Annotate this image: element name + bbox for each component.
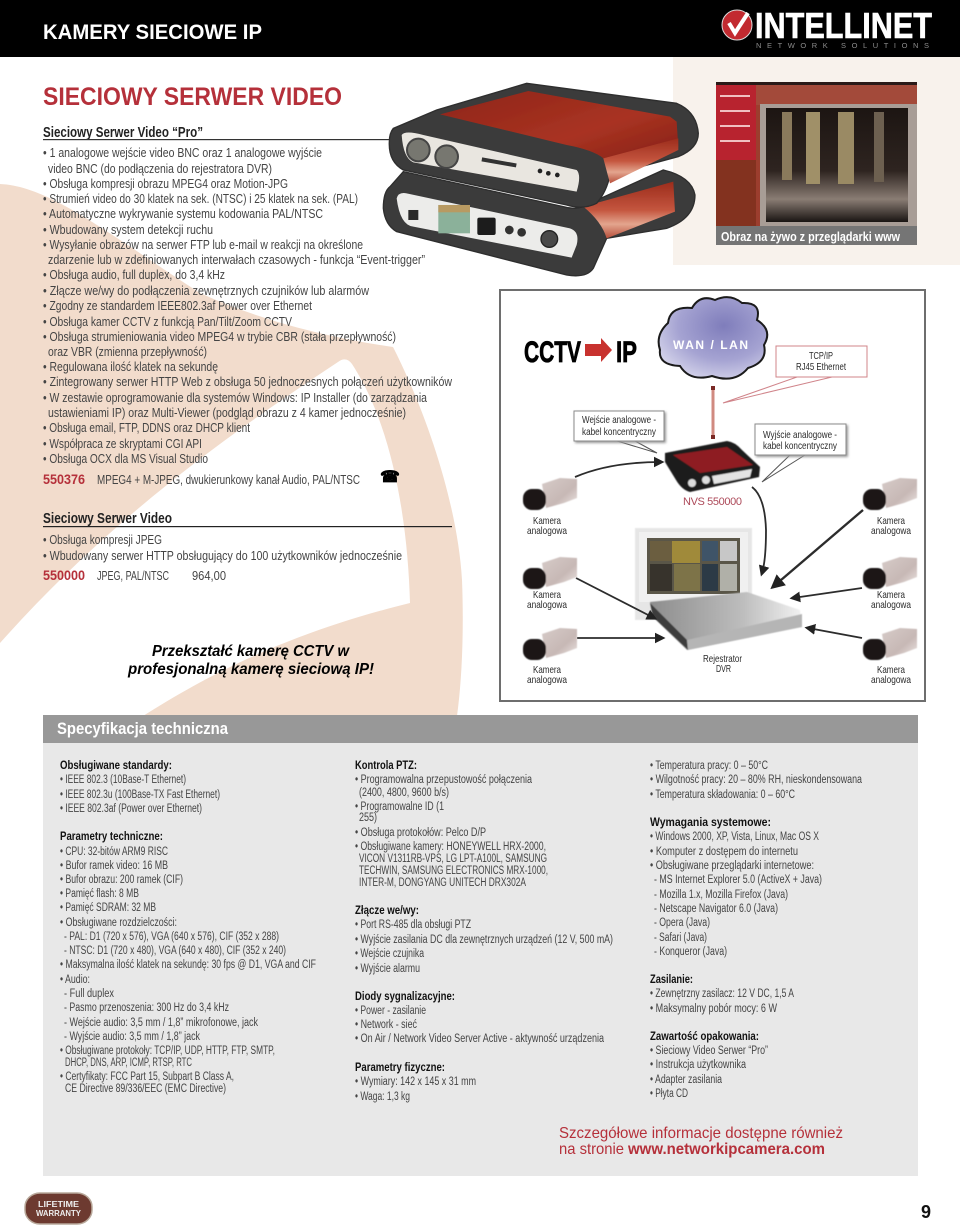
- feature list: Pro: • 1 analogowe wejście video BNC oraz 1 analogowe wyjście: [43, 146, 322, 160]
- spec column 3: Zawartość opakowania:: [650, 1031, 759, 1043]
- spec column 1: - NTSC: D1 (720 x 480), VGA (640 x 480), CIF (352 x 240): [64, 945, 286, 957]
- label: analog input: kabel koncentryczny: [582, 426, 657, 438]
- label: analog input: [574, 411, 664, 453]
- spec column 2: • Obsługiwane kamery: HONEYWELL HRX-2000,: [355, 841, 546, 853]
- section heading: Pro: Sieciowy Serwer Video “Pro”: [43, 125, 203, 141]
- feature list: Pro: • Obsługa email, FTP, DDNS oraz DHCP klient: [43, 421, 250, 435]
- spec column 1: - Full duplex: [64, 988, 114, 1000]
- title: CCTV to IP: CCTV: [524, 336, 581, 369]
- icon: telephone: ☎: [380, 467, 400, 486]
- feature list: 550000: • Obsługa kompresji JPEG: [43, 533, 162, 547]
- spec column 1: • Pamięć SDRAM: 32 MB: [60, 902, 156, 914]
- logo: Intellinet: INTELLINET: [755, 5, 932, 46]
- spec column 3: - Konqueror (Java): [654, 946, 727, 958]
- decorative peach arc: [0, 184, 463, 716]
- spec column 3: - Netscape Navigator 6.0 (Java): [654, 903, 778, 915]
- label: TCP/IP: [723, 346, 867, 403]
- spec column 2: Parametry fizyczne:: [355, 1062, 445, 1074]
- panel: technical specification: [43, 715, 918, 1176]
- spec column 2: • Waga: 1,3 kg: [355, 1091, 410, 1103]
- label: DVR: [703, 653, 742, 675]
- section heading: Sieciowy Serwer Video: Sieciowy Serwer Video: [43, 511, 172, 527]
- caption bar: [716, 226, 917, 245]
- badge: lifetime warranty: [25, 1193, 92, 1224]
- spec column 1: • Audio:: [60, 974, 90, 986]
- label: analog output: [755, 424, 846, 482]
- spec column 2: INTER-M, DONGYANG UNITECH DRX302A: [359, 877, 526, 889]
- spec column 3: • Windows 2000, XP, Vista, Linux, Mac OS X: [650, 831, 819, 843]
- spec column 1: • Obsługiwane rozdzielczości:: [60, 917, 177, 929]
- spec column 2: • Programowalna przepustowość połączenia: [355, 774, 532, 786]
- spec column 3: - Safari (Java): [654, 932, 707, 944]
- spec column 1: - Wyjście audio: 3,5 mm / 1,8” jack: [64, 1031, 200, 1043]
- product code: 550000: [43, 567, 226, 583]
- camera: right top: [863, 478, 917, 537]
- camera: right top: Kamera: [877, 515, 905, 527]
- spec column 2: • Wyjście zasilania DC dla zewnętrznych urządzeń (12 V, 500 mA): [355, 934, 613, 946]
- browser screenshot: [716, 82, 917, 226]
- spec column 3: - Mozilla 1.x, Mozilla Firefox (Java): [654, 889, 788, 901]
- camera: right bottom: analogowa: [871, 674, 911, 686]
- feature list: Pro: • Obsługa audio, full duplex, do 3,4 kHz: [43, 268, 225, 282]
- camera: left bottom: [523, 628, 577, 686]
- camera: right middle: [863, 557, 917, 611]
- callout: slogan: profesjonalną kamerę sieciową IP!: [127, 661, 375, 678]
- label: DVR: Rejestrator: [703, 653, 742, 665]
- spec title bar: Specyfikacja techniczna: [57, 720, 229, 738]
- bottom unit front panel: [397, 193, 577, 258]
- feature list: Pro: oraz VBR (zmienna przepływność): [48, 345, 207, 359]
- spec column 1: Obsługiwane standardy:: [60, 760, 172, 772]
- camera: left middle: [523, 557, 577, 611]
- spec column 2: VICON V1311RB-VPS, LG LPT-A100L, SAMSUNG: [359, 853, 547, 865]
- spec column 2: • Wymiary: 142 x 145 x 31 mm: [355, 1076, 476, 1088]
- feature list: Pro: • Obsługa strumieniowania video MPEG4 w trybie CBR (stała przepływność): [43, 330, 396, 344]
- feature list: Pro: • Automatyczne wykrywanie systemu kodowania PAL/NTSC: [43, 207, 323, 221]
- top unit red cover: [440, 91, 678, 173]
- spec column 1: Parametry techniczne:: [60, 831, 163, 843]
- spec column 3: • Maksymalny pobór mocy: 6 W: [650, 1003, 777, 1015]
- page number: 9: [921, 1202, 931, 1222]
- callout: slogan: Przekształć kamerę CCTV w: [152, 643, 350, 660]
- feature list: Pro: • Współpraca ze skryptami CGI API: [43, 437, 202, 451]
- feature list: Pro: • Wbudowany system detekcji ruchu: [43, 223, 213, 237]
- main heading: SIECIOWY SERWER VIDEO: [43, 83, 342, 111]
- feature list: Pro: • Regulowana ilość klatek na sekundę: [43, 360, 218, 374]
- spec column 1: • Bufor obrazu: 200 ramek (CIF): [60, 874, 183, 886]
- spec column 3: • Adapter zasilania: [650, 1074, 722, 1086]
- caption bar: Obraz na żywo z przeglądarki www: [721, 230, 900, 244]
- label: DVR: DVR: [716, 663, 731, 675]
- feature list: Pro: • Wysyłanie obrazów na serwer FTP lub e-mail w reakcji na określone: [43, 238, 363, 252]
- callout: slogan: [127, 643, 375, 678]
- photo: network video servers: [383, 83, 698, 276]
- spec column 2: Złącze we/wy:: [355, 905, 419, 917]
- feature list: Pro: • Obsługa kamer CCTV z funkcją Pan/Tilt/Zoom CCTV: [43, 315, 293, 329]
- camera: right bottom: [863, 628, 917, 686]
- spec column 2: [355, 760, 613, 1103]
- spec column 2: • Wyjście alarmu: [355, 963, 420, 975]
- spec column 2: • On Air / Network Video Server Active - aktywność urządzenia: [355, 1033, 604, 1045]
- website note: Szczegółowe informacje dostępne również: [559, 1125, 843, 1142]
- spec column 3: • Wilgotność pracy: 20 – 80% RH, nieskondensowana: [650, 774, 862, 786]
- product code: 550000: 550000: [43, 567, 85, 583]
- feature list: Pro: • Zintegrowany serwer HTTP Web z obsługa 50 jednoczesnych połączeń użytkowników: [43, 375, 453, 389]
- top unit front panel: [402, 132, 579, 192]
- panel: CCTV to IP diagram: [500, 290, 925, 701]
- feature list: Pro: video BNC (do podłączenia do rejestratora DVR): [48, 162, 272, 176]
- label: TCP/IP: TCP/IP: [809, 350, 833, 362]
- header bar: [0, 0, 960, 57]
- feature list: Pro: zdarzenie lub w zdefiniowanych interwałach czasowych - funkcja “Event-trigger”: [48, 253, 425, 267]
- spec column 3: - Opera (Java): [654, 917, 710, 929]
- label: analog input: Wejście analogowe -: [582, 414, 656, 426]
- feature list: Pro: • Obsługa OCX dla MS Visual Studio: [43, 452, 208, 466]
- ethernet cable: [711, 386, 715, 439]
- top unit body: [389, 83, 698, 207]
- camera: left middle: analogowa: [527, 599, 567, 611]
- feature list: Pro: • Strumień video do 30 klatek na sek. (NTSC) i 25 klatek na sek. (PAL): [43, 192, 358, 206]
- spec column 1: - Wejście audio: 3,5 mm / 1,8” mikrofonowe, jack: [64, 1017, 258, 1029]
- icon: monitor: [635, 528, 752, 620]
- product code: 550000: JPEG, PAL/NTSC: [97, 569, 169, 583]
- spec column 1: • Pamięć flash: 8 MB: [60, 888, 139, 900]
- label: NVS 550000: NVS 550000: [683, 496, 742, 508]
- feature list: Pro: • Zgodny ze standardem IEEE802.3af Power over Ethernet: [43, 299, 312, 313]
- spec column 3: • Sieciowy Video Serwer “Pro”: [650, 1045, 768, 1057]
- bottom unit red side: [583, 182, 675, 238]
- spec column 3: • Temperatura składowania: 0 – 60°C: [650, 789, 795, 801]
- spec column 2: • Port RS-485 dla obsługi PTZ: [355, 919, 471, 931]
- camera: left bottom: Kamera: [533, 664, 561, 676]
- logo: Intellinet: NETWORK SOLUTIONS: [756, 41, 929, 50]
- spec column 1: • CPU: 32-bitów ARM9 RISC: [60, 846, 168, 858]
- spec column 3: • Temperatura pracy: 0 – 50°C: [650, 760, 768, 772]
- spec column 2: (2400, 4800, 9600 b/s): [359, 787, 449, 799]
- spec column 1: [60, 760, 316, 1095]
- spec title bar: [43, 715, 918, 743]
- spec column 3: Zasilanie:: [650, 974, 693, 986]
- spec column 1: CE Directive 89/336/EEC (EMC Directive): [65, 1083, 226, 1095]
- spec column 3: • Płyta CD: [650, 1088, 688, 1100]
- feature list: 550000: [43, 533, 402, 563]
- spec column 2: Diody sygnalizacyjne:: [355, 991, 455, 1003]
- feature list: Pro: • W zestawie oprogramowanie dla systemów Windows: IP Installer (do zarządzania: [43, 391, 427, 405]
- camera: right middle: Kamera: [877, 589, 905, 601]
- bottom unit body: [383, 170, 695, 276]
- feature list: Pro: • Obsługa kompresji obrazu MPEG4 oraz Motion-JPG: [43, 177, 288, 191]
- spec column 1: • IEEE 802.3 (10Base-T Ethernet): [60, 774, 186, 786]
- spec column 1: • Maksymalna ilość klatek na sekundę: 30 fps @ D1, VGA and CIF: [60, 959, 316, 971]
- camera: left top: Kamera: [533, 515, 561, 527]
- feature list: Pro: [43, 146, 453, 466]
- camera: right top: analogowa: [871, 525, 911, 537]
- spec column 1: • Bufor ramek video: 16 MB: [60, 860, 168, 872]
- spec column 3: • Obsługiwane przeglądarki internetowe:: [650, 860, 814, 872]
- label: TCP/IP: RJ45 Ethernet: [796, 361, 846, 373]
- website note: [559, 1125, 843, 1158]
- spec column 3: [650, 760, 862, 1100]
- product code: 550376: [43, 471, 360, 487]
- icon: NVS device: [665, 441, 760, 492]
- website note: na stronie: [559, 1141, 624, 1158]
- spec column 1: - PAL: D1 (720 x 576), VGA (640 x 576), CIF (352 x 288): [64, 931, 279, 943]
- spec column 2: • Wejście czujnika: [355, 948, 424, 960]
- camera: left bottom: analogowa: [527, 674, 567, 686]
- label: analog output: kabel koncentryczny: [763, 440, 838, 452]
- camera: right bottom: Kamera: [877, 664, 905, 676]
- title: CCTV to IP: IP: [616, 336, 637, 369]
- spec column 1: • Obsługiwane protokoły: TCP/IP, UDP, HTTP, FTP, SMTP,: [60, 1045, 275, 1057]
- feature list: 550000: • Wbudowany serwer HTTP obsługujący do 100 użytkowników jednocześnie: [43, 549, 402, 563]
- spec column 2: TECHWIN, SAMSUNG ELECTRONICS MRX-1000,: [359, 865, 548, 877]
- feature list: Pro: ustawieniami IP) oraz Multi-Viewer (podgląd obrazu z 4 kamer jednocześnie): [48, 406, 406, 420]
- spec column 1: • Certyfikaty: FCC Part 15, Subpart B Class A,: [60, 1071, 234, 1083]
- website note: www.networkipcamera.com: [627, 1141, 825, 1158]
- spec column 2: Kontrola PTZ:: [355, 760, 417, 772]
- spec column 2: • Power - zasilanie: [355, 1005, 426, 1017]
- panel: browser live view: [673, 57, 960, 265]
- arrows: video connections: [575, 462, 863, 638]
- label: analog output: Wyjście analogowe -: [763, 429, 837, 441]
- icon: WAN LAN cloud: WAN / LAN: [673, 338, 748, 352]
- product code: 550000: 964,00: [192, 569, 226, 583]
- spec column 3: - MS Internet Explorer 5.0 (ActiveX + Java): [654, 874, 822, 886]
- camera: right middle: analogowa: [871, 599, 911, 611]
- spec column 2: • Programowalne ID (1: [355, 801, 444, 813]
- spec column 1: • IEEE 802.3af (Power over Ethernet): [60, 803, 202, 815]
- spec column 3: • Zewnętrzny zasilacz: 12 V DC, 1,5 A: [650, 988, 794, 1000]
- icon: WAN LAN cloud: [659, 297, 767, 379]
- logo: Intellinet: [722, 5, 932, 50]
- camera: left top: analogowa: [527, 525, 567, 537]
- spec column 1: DHCP, DNS, ARP, ICMP, RTSP, RTC: [65, 1057, 192, 1069]
- camera: left top: [523, 478, 577, 537]
- header title: KAMERY SIECIOWE IP: [43, 21, 262, 44]
- spec column 1: • IEEE 802.3u (100Base-TX Fast Ethernet): [60, 789, 220, 801]
- icon: DVR recorder: [650, 592, 802, 650]
- product code: 550376: MPEG4 + M-JPEG, dwukierunkowy kanał Audio, PAL/NTSC: [97, 473, 360, 487]
- spec column 2: • Obsługa protokołów: Pelco D/P: [355, 827, 486, 839]
- badge: lifetime warranty: WARRANTY: [36, 1209, 82, 1218]
- product code: 550376: 550376: [43, 471, 85, 487]
- feature list: Pro: • Złącze we/wy do podłączenia zewnętrznych czujników lub alarmów: [43, 284, 370, 298]
- spec column 2: • Network - sieć: [355, 1019, 417, 1031]
- spec column 3: Wymagania systemowe:: [650, 817, 771, 829]
- spec column 3: • Instrukcja użytkownika: [650, 1059, 746, 1071]
- spec column 2: 255): [359, 812, 377, 824]
- spec column 3: • Komputer z dostępem do internetu: [650, 846, 798, 858]
- badge: lifetime warranty: LIFETIME: [38, 1200, 80, 1209]
- spec column 1: - Pasmo przenoszenia: 300 Hz do 3,4 kHz: [64, 1002, 229, 1014]
- camera: left middle: Kamera: [533, 589, 561, 601]
